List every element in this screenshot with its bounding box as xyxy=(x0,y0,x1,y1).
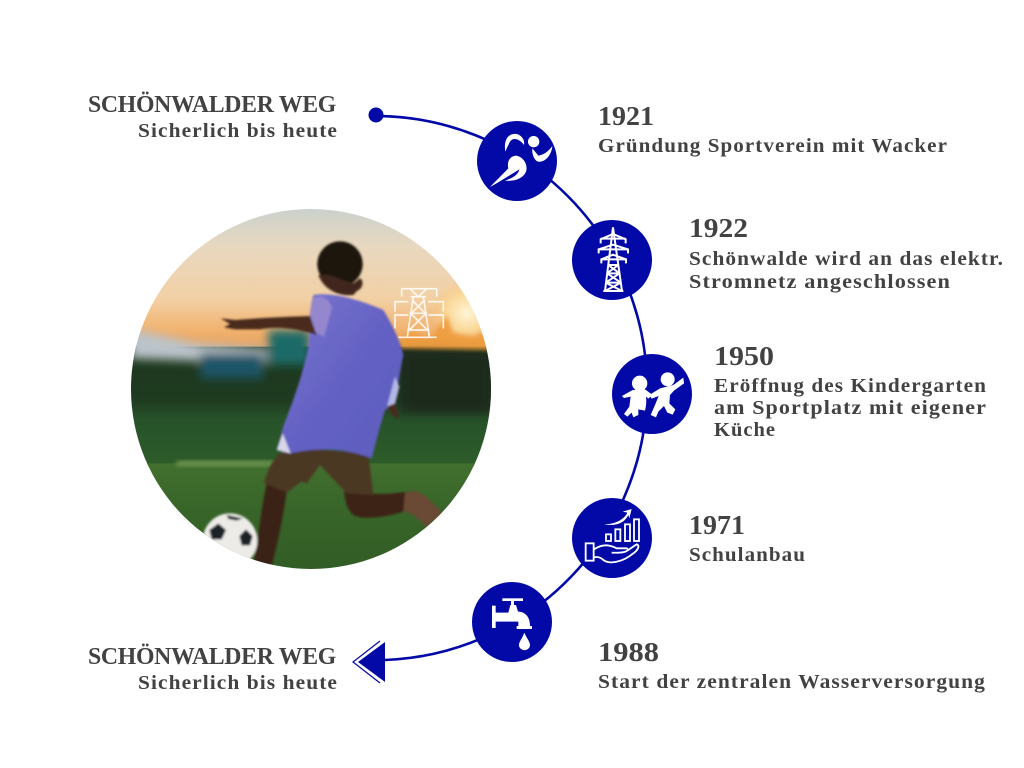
icon: power pylon xyxy=(572,220,652,300)
heading: bottom left: SCHÖNWALDER WEG xyxy=(88,643,336,670)
icon: faint white pylon overlay xyxy=(395,289,443,337)
text: 1950: Eröffnug des Kindergarten xyxy=(714,375,987,397)
text: 1950: am Sportplatz mit eigener xyxy=(714,397,987,419)
icon: hand with growing bar chart xyxy=(572,498,652,578)
end arrow xyxy=(353,641,385,683)
text: 1921: 1921 xyxy=(598,101,654,131)
text: 1971: Schulanbau xyxy=(689,544,806,566)
heading: bottom left: Sicherlich bis heute xyxy=(138,672,338,694)
text: 1988: Start der zentralen Wasserversorgung xyxy=(598,671,986,693)
icon: two children holding hands xyxy=(612,354,692,434)
icon: water tap with drop xyxy=(472,582,552,662)
heading: top left: Sicherlich bis heute xyxy=(138,120,338,142)
text: 1922 xyxy=(689,213,1004,293)
heading: top left: SCHÖNWALDER WEG xyxy=(88,91,336,118)
icon: runner xyxy=(477,121,557,201)
text: 1950: 1950 xyxy=(714,341,774,371)
text: 1921: Gründung Sportverein mit Wacker xyxy=(598,135,948,157)
text: 1922: Stromnetz angeschlossen xyxy=(689,271,951,293)
text: 1988 xyxy=(598,637,986,693)
text: 1971 xyxy=(689,510,806,566)
text: 1988: 1988 xyxy=(598,637,659,667)
heading: bottom left xyxy=(88,643,338,694)
heading: top left xyxy=(88,91,338,142)
text: 1921 xyxy=(598,101,948,157)
text: 1950: Küche xyxy=(714,419,776,441)
text: 1971: 1971 xyxy=(689,510,745,540)
text: 1922: 1922 xyxy=(689,213,748,243)
photo: boy kicking a football at sunset xyxy=(131,209,491,569)
start dot xyxy=(368,108,384,122)
text: 1922: Schönwalde wird an das elektr. xyxy=(689,248,1004,270)
text: 1950 xyxy=(714,341,987,441)
timeline arc xyxy=(376,116,647,660)
